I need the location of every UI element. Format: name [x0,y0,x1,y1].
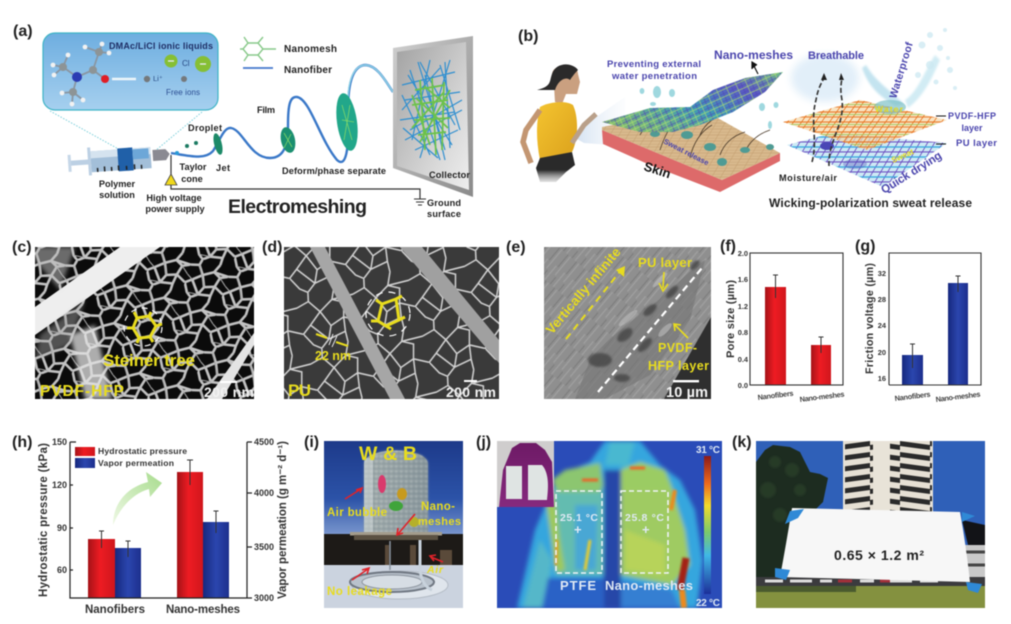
legend: Hydrostatic pressure [98,446,187,456]
labels of panel d: 22 nm [315,349,351,363]
labels of panel j: 31 °C [696,445,720,456]
dashed measurement boxes [556,491,668,573]
collector with fiber network [393,36,473,197]
icon: yellow Steiner tree cell [124,308,162,346]
y axis label: Pore size (µm) [725,280,737,358]
legend: Nanomesh and Nanofiber [240,37,337,76]
tick labels: 0.8 [738,328,748,337]
tick labels: 150 [52,437,67,447]
labels of panel a: Jet [216,163,230,173]
labels of panel b: layer [961,123,983,133]
tick labels: 24 [878,321,887,330]
tick labels: 4000 [254,488,274,498]
photo: sheet in front of building [755,440,986,609]
labels of panel i: W & B [359,443,417,465]
tick labels: 0.4 [738,355,749,364]
tick labels: 4500 [254,437,274,447]
label (g): (g) [855,238,875,255]
area label: 0.65 × 1.2 m² [834,547,924,563]
axes box [750,253,843,385]
labels of panel c: PVDF-HFP [40,383,124,400]
illustration: runner [523,64,625,182]
tick labels: 120 [52,480,67,490]
labels of panel d: PU [288,381,311,400]
labels of panel a: High voltage [146,193,202,203]
labels of panel j: + [574,522,582,537]
labels of panel e: 10 µm [666,385,708,401]
label (i): (i) [304,434,319,451]
callout: DMAc/LiCl ionic liquids: DMAc/LiCl ionic liquids [109,41,213,51]
tick labels: Nano-meshes [935,390,981,404]
labels of panel a: surface [427,209,461,219]
labels of panel i: meshes [418,516,461,528]
labels of panel b: Preventing external [607,59,701,70]
panel: (k) large-area nano-mesh photo [732,434,985,608]
labels of panel c: 200 nm [204,384,254,400]
labels of panel a: Electromeshing [228,196,367,218]
labels of panel a: power supply [145,204,205,214]
circuit wires and ground [165,155,426,205]
labels of panel b: PVDF-HFP [948,111,996,121]
dotted zoom lines [50,111,202,151]
right axis label: Vapor permeation (g m⁻² d⁻¹) [277,441,289,599]
inset: jacket photo [497,441,554,507]
labels of panel b: PU layer [956,138,997,149]
illustration: PVDF-HFP and PU mesh layers [783,73,947,187]
callout: DMAc/LiCl ionic liquids: Cl [182,59,190,68]
tick labels: 2.0 [738,249,748,258]
tick labels: 90 [57,523,67,533]
labels of panel a [99,105,470,219]
callout: DMAc/LiCl ionic liquids: Free ions [166,88,200,97]
label (a): (a) [13,23,33,40]
legend: Nanomesh and Nanofiber: Nanomesh [284,44,337,55]
red arrows [345,488,443,580]
legend [75,446,187,468]
tick labels [878,269,981,404]
legend: Nanomesh and Nanofiber: Nanofiber [284,65,332,76]
labels of panel a: Polymer [99,179,136,189]
label (h): (h) [12,434,32,451]
labels of panel b [607,40,997,210]
panel: (h) hydrostatic pressure and vapor permeation chart [12,434,289,616]
dashed boundary and arrows [566,266,702,392]
tick labels: Nano-meshes [166,604,240,616]
panel: (f) pore size bar chart [720,238,845,404]
label (j): (j) [476,434,491,451]
labels of panel c: Steiner tree [103,351,195,370]
callout: DMAc/LiCl ionic liquids [43,33,218,110]
tick labels: 0.0 [738,381,748,390]
labels of panel e [543,244,709,401]
labels of panel a: Film [257,105,275,115]
labels of panel a: solution [99,190,135,200]
label (e): (e) [506,239,526,256]
labels of panel b: Water [875,104,904,114]
labels of panel e: Vertically infinite [543,244,624,337]
photo: water column [323,440,464,608]
panel: (j) infrared thermal image [476,434,722,609]
label (d): (d) [262,239,282,256]
tick labels [738,249,845,404]
axes [70,442,252,598]
SEM micrograph c [34,246,255,400]
panel: (d) PU SEM image [262,239,499,400]
panel: (c) PVDF-HFP SEM image [12,239,254,400]
tick labels: 3000 [254,593,274,603]
SEM micrograph d [283,246,500,400]
axes box [889,253,981,385]
colour scale bar [704,456,711,594]
legend: Vapor permeation [98,458,174,468]
illustration: water splash and breathable cloud [791,28,957,108]
labels of panel a: Deform/phase separate [282,166,386,176]
tick labels [52,437,274,616]
label (b): (b) [518,28,538,45]
labels of panel b: Skin [642,159,673,181]
tick labels: 1.6 [738,275,748,284]
labels of panel a: Collector [429,170,470,180]
label (f): (f) [720,238,736,255]
tick labels: 32 [878,269,886,278]
labels of panel j [560,445,720,609]
labels of panel j: 25.8 °C [625,512,664,524]
labels of panel e: HFP layer [648,359,709,373]
labels of panel b: Breathable [808,50,864,62]
tick labels: Nano-meshes [799,390,845,404]
panel: (e) cross-section SEM image [506,239,711,401]
labels of panel b: Nano-meshes [714,48,793,62]
tick labels: 60 [57,565,67,575]
labels of panel a: Droplet [188,123,222,133]
labels of panel c [40,351,254,400]
tick labels: 16 [878,374,886,383]
SEM micrograph e [543,246,712,400]
fiber path with films [171,65,393,162]
left axis label: Hydrostatic pressure (kPa) [38,443,50,597]
panel: (a) electromeshing schematic [13,23,473,219]
tick labels: Nanofibers [894,390,931,403]
callout: DMAc/LiCl ionic liquids: Li⁺ [153,74,163,83]
labels of panel a: Ground [427,198,461,208]
labels of panel a: cone [181,174,203,184]
labels of panel e: PVDF- [658,341,697,355]
tick labels: 28 [878,295,886,304]
bars [902,276,968,385]
labels of panel b: Quick drying [879,150,944,197]
panel: (b) wicking-polarization sweat release [518,28,997,210]
illustration: skin block with nano-mesh [602,62,783,192]
labels of panel b: Waterproof [887,40,916,100]
labels of panel d [288,334,496,400]
labels of panel b: Wicking-polarization sweat release [769,196,972,210]
panel: (g) friction voltage bar chart [855,238,981,404]
label (k): (k) [732,434,752,451]
tick labels: 20 [878,348,886,357]
labels of panel i [327,443,461,598]
green trend arrow [113,472,162,525]
tick labels: Nanofibers [757,389,794,402]
tick labels: Nanofibers [85,604,145,616]
label (c): (c) [12,239,32,256]
labels of panel j: + [642,522,650,537]
labels of panel a: Taylor [180,162,207,172]
labels of panel d: 200 nm [446,384,496,400]
labels of panel e: PU layer [638,255,692,270]
tick labels: 1.2 [738,302,748,311]
tick labels: 3500 [254,542,274,552]
labels of panel i: Nano- [421,501,455,513]
bars [765,275,831,385]
y axis label: Friction voltage (µm) [864,263,876,374]
labels of panel b: Sweat [890,147,915,165]
icon: syringe [67,142,171,177]
labels of panel b: Moisture/air [779,173,837,183]
thermal image [496,440,723,609]
labels of panel i: No leakage [327,586,392,598]
labels of panel j: PTFE [560,578,596,593]
labels of panel j: Nano-meshes [605,578,693,593]
labels of panel i: Air bubble [327,507,387,519]
icon: yellow Steiner cell [366,292,410,336]
panel: (i) W and B photo [304,434,463,608]
bars [88,460,229,598]
labels of panel b: Sweat release [662,137,710,167]
labels of panel j: 25.1 °C [560,512,598,524]
labels of panel j: 22 °C [696,598,720,609]
labels of panel b: water penetration [611,71,697,82]
labels of panel i: Air [426,564,444,576]
